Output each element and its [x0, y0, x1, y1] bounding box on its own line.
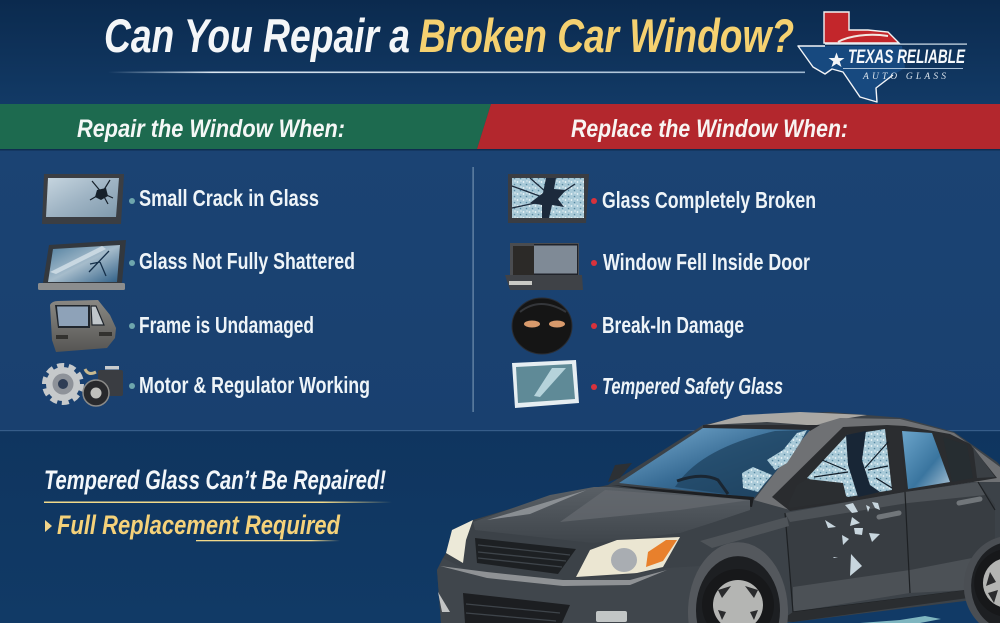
- car: fog lamp: [596, 611, 627, 622]
- car: hood: [473, 487, 750, 543]
- icon: small crack windshield: [42, 174, 124, 224]
- text: fell inside: Window Fell Inside Door: [603, 249, 810, 275]
- car: door lower panel: [793, 558, 972, 612]
- title: Can You Repair a: [104, 9, 410, 62]
- background: bottom panel: [0, 431, 1000, 623]
- car: fender highlight: [700, 517, 789, 548]
- car: door seams: [785, 482, 995, 612]
- car: door panels: [785, 482, 995, 612]
- callout heading: Tempered Glass Can’t Be Repaired!: [44, 465, 386, 495]
- background: main panel: [0, 150, 1000, 431]
- car: steering wheel: [677, 476, 728, 494]
- bullet: [129, 323, 135, 329]
- logo: red panhandle: [824, 12, 899, 43]
- car: bumper highlight: [440, 566, 667, 586]
- illustration: damaged car: [437, 412, 1000, 623]
- car: left headlight: [446, 520, 473, 563]
- car: front arch well: [696, 556, 780, 623]
- logo: Texas Reliable Auto Glass: [798, 12, 967, 102]
- car: bumper: [437, 558, 700, 623]
- car: front door window: [807, 429, 892, 497]
- header band: replace: [477, 104, 1000, 149]
- car: windshield: [619, 428, 810, 498]
- car: rear wheel: [964, 537, 1000, 623]
- car: rear quarter window: [943, 437, 973, 482]
- icon: car door: [50, 300, 116, 352]
- bullet: [591, 384, 597, 390]
- car: door shoulder highlight: [785, 482, 985, 522]
- bullet: [129, 383, 135, 389]
- car: glass on ground: [860, 616, 941, 623]
- callout: tempered glass: [44, 465, 392, 541]
- bullet: [129, 260, 135, 266]
- car: body silhouette: [437, 412, 1000, 623]
- bullet: [129, 198, 135, 204]
- logo: white outline: [798, 46, 893, 102]
- bullet: [591, 323, 597, 329]
- bullet: [591, 198, 597, 204]
- car: flying glass shards: [825, 502, 880, 576]
- car: dash line: [612, 485, 754, 507]
- car: headlight lens: [611, 548, 637, 572]
- car: sill: [780, 590, 968, 622]
- car: hood highlight: [487, 487, 594, 520]
- text: tempered safety: Tempered Safety Glass: [602, 373, 783, 399]
- car: windshield top strip: [703, 425, 820, 431]
- car: rear window: [902, 431, 950, 489]
- car: right mirror: [788, 479, 847, 508]
- icon: gear and motor: [44, 366, 123, 406]
- text: frame: Frame is Undamaged: [139, 312, 314, 338]
- car: front wheel arch: [688, 542, 788, 623]
- logo: blue Texas shape: [798, 46, 905, 102]
- icon: door with dropped window: [505, 243, 583, 290]
- header band: repair: [0, 104, 491, 149]
- car: door handles: [879, 513, 899, 517]
- car: window surround: [772, 425, 997, 511]
- car: hood light plane: [560, 490, 750, 522]
- car: windshield darker zone: [675, 430, 810, 498]
- car: B pillar: [887, 428, 905, 492]
- car: headlight: [576, 537, 680, 577]
- background: top banner: [0, 0, 1000, 105]
- car: left mirror: [608, 463, 632, 482]
- arrow: [45, 520, 52, 532]
- text: motor: Motor & Regulator Working: [139, 372, 370, 398]
- logo: star: [828, 52, 844, 67]
- car: turn signal: [646, 540, 677, 567]
- panel: repair list: [38, 174, 370, 406]
- text: completely broken: Glass Completely Broken: [602, 187, 816, 213]
- callout emphasis: Full Replacement Required: [57, 510, 340, 540]
- logo: tagline: AUTO GLASS: [862, 72, 946, 82]
- icon: shattered windshield: [508, 174, 589, 223]
- car: bumper corner: [438, 592, 450, 612]
- title: highlighted words: Broken Car Window?: [419, 9, 794, 62]
- icon: tempered glass photo: [512, 360, 579, 408]
- icon: burglar mask: [512, 298, 572, 354]
- replace heading: Replace the Window When:: [571, 115, 848, 143]
- text: small crack: Small Crack in Glass: [139, 185, 319, 211]
- text: break-in: Break-In Damage: [602, 312, 744, 338]
- icon: partly shattered windshield: [38, 240, 126, 290]
- repair heading: Repair the Window When:: [77, 115, 345, 143]
- car: upper door frame: [754, 418, 1000, 510]
- car: lower grille: [463, 593, 570, 623]
- bullet: [591, 260, 597, 266]
- panel: replace list: [505, 174, 816, 408]
- car: front wheel: [702, 569, 774, 623]
- car: front door window cracks: [814, 431, 892, 497]
- column divider: [472, 167, 474, 412]
- car: grille: [475, 538, 576, 574]
- car: windshield shatter: [742, 430, 807, 492]
- text: not shattered: Glass Not Fully Shattered: [139, 248, 355, 274]
- car: roof: [707, 412, 867, 426]
